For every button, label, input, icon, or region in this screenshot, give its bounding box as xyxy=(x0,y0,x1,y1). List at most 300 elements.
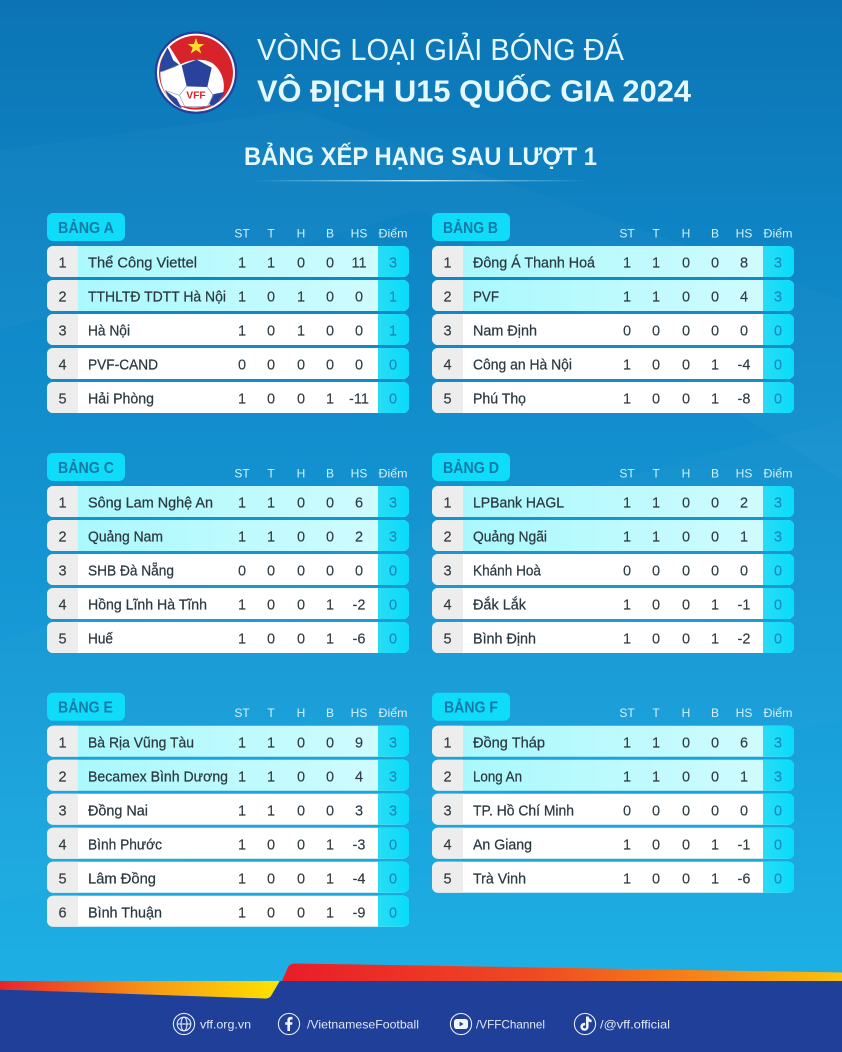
row 4: 1 xyxy=(711,358,719,374)
row 4: 4 xyxy=(443,837,452,853)
youtube text: /VFFChannel xyxy=(476,1018,545,1032)
column headers xyxy=(234,226,408,240)
row 1: 0 xyxy=(297,256,305,272)
row 4: 0 xyxy=(652,837,660,853)
row 1: Sông Lam Nghệ An xyxy=(88,496,213,512)
row 2 xyxy=(47,520,409,551)
row 2: 1 xyxy=(238,530,246,546)
row 2: 1 xyxy=(389,290,397,306)
row 1: 11 xyxy=(351,256,367,272)
row 1: 1 xyxy=(623,735,631,751)
row 2: 3 xyxy=(774,769,782,785)
row 2: Quảng Ngãi xyxy=(473,530,547,546)
row 4: 0 xyxy=(238,358,246,374)
panel: Bảng E xyxy=(47,693,409,927)
row 5 xyxy=(432,862,794,893)
row 3: 3 xyxy=(443,564,452,580)
row 2: 0 xyxy=(297,530,305,546)
row 2: 1 xyxy=(238,290,246,306)
row 2: 0 xyxy=(326,290,334,306)
row 5: -2 xyxy=(738,632,750,648)
row 6: 1 xyxy=(238,905,246,921)
row 2: 0 xyxy=(326,530,334,546)
row 5 xyxy=(47,862,409,893)
row 3: 0 xyxy=(740,803,748,819)
panel: Bảng F xyxy=(432,693,794,893)
row 2: 2 xyxy=(58,530,67,546)
row 4: 0 xyxy=(682,598,690,614)
row 2: Quảng Nam xyxy=(88,530,163,546)
row 4: 0 xyxy=(267,358,275,374)
column headers: HS xyxy=(736,226,752,240)
row 2: 0 xyxy=(326,769,334,785)
row 4 xyxy=(47,588,409,619)
row 1: 8 xyxy=(740,256,748,272)
column headers: Điểm xyxy=(378,706,408,720)
column headers: Điểm xyxy=(378,226,408,240)
row 2 xyxy=(47,760,409,791)
row 2: 2 xyxy=(58,769,67,785)
row 1: 0 xyxy=(682,735,690,751)
row 3: 0 xyxy=(326,324,334,340)
row 1: 2 xyxy=(740,496,748,512)
row 2: 3 xyxy=(774,530,782,546)
row 5: -11 xyxy=(349,392,369,408)
column headers: T xyxy=(267,226,275,240)
column headers: Điểm xyxy=(378,466,408,480)
group label xyxy=(432,453,510,481)
row 2 xyxy=(47,280,409,311)
row 2: 1 xyxy=(740,769,748,785)
row 1: 1 xyxy=(58,256,67,272)
column headers: T xyxy=(652,466,660,480)
row 3: 0 xyxy=(740,324,748,340)
row 4: -4 xyxy=(738,358,750,374)
row 1: 1 xyxy=(652,496,660,512)
row 4: -1 xyxy=(738,837,750,853)
row 5: 0 xyxy=(682,871,690,887)
row 6: -9 xyxy=(353,905,365,921)
row 1: 1 xyxy=(652,735,660,751)
panel: Bảng C xyxy=(47,453,409,653)
row 5: 0 xyxy=(389,392,397,408)
row 2: Long An xyxy=(473,769,522,785)
row 1: 0 xyxy=(326,496,334,512)
tiktok text: /@vff.official xyxy=(600,1018,670,1032)
row 1: 1 xyxy=(58,735,67,751)
row 5: 1 xyxy=(326,871,334,887)
row 2: 2 xyxy=(355,530,363,546)
row 5: 0 xyxy=(297,871,305,887)
row 5 xyxy=(47,382,409,413)
row 3 xyxy=(432,554,794,585)
row 6 xyxy=(47,896,409,927)
row 5: 0 xyxy=(267,632,275,648)
row 1: 1 xyxy=(238,496,246,512)
row 2: 0 xyxy=(711,290,719,306)
group label xyxy=(432,213,510,241)
row 4: 4 xyxy=(58,598,67,614)
row 4: 1 xyxy=(326,837,334,853)
row 4: -3 xyxy=(353,837,365,853)
row 5: -6 xyxy=(353,632,365,648)
row 1: 6 xyxy=(355,496,363,512)
row 2: 1 xyxy=(623,530,631,546)
title: VÒNG LOẠI GIẢI BÓNG ĐÁ xyxy=(257,32,624,67)
column headers: T xyxy=(652,706,660,720)
row 3: 0 xyxy=(267,564,275,580)
row 1: Đông Á Thanh Hoá xyxy=(473,255,596,272)
row 1: 3 xyxy=(389,735,397,751)
row 1: 3 xyxy=(774,256,782,272)
row 6: 0 xyxy=(267,905,275,921)
row 3: 0 xyxy=(355,324,363,340)
row 2: 1 xyxy=(623,290,631,306)
row 2: 0 xyxy=(682,290,690,306)
title: VÔ ĐỊCH U15 QUỐC GIA 2024 xyxy=(257,72,692,108)
row 1 xyxy=(432,246,794,277)
column headers: T xyxy=(652,226,660,240)
column headers: B xyxy=(711,706,719,720)
row 4: 4 xyxy=(443,598,452,614)
row 4: -2 xyxy=(353,598,365,614)
row 4: 0 xyxy=(297,358,305,374)
group label xyxy=(47,693,125,721)
column headers: Điểm xyxy=(764,706,792,720)
row 2 xyxy=(432,520,794,551)
row 1: 1 xyxy=(443,735,452,751)
row 3 xyxy=(47,554,409,585)
row 3: Khánh Hoà xyxy=(473,564,542,580)
row 1: 1 xyxy=(58,496,67,512)
group label xyxy=(47,453,125,481)
row 5: 1 xyxy=(623,392,631,408)
row 4: 1 xyxy=(623,358,631,374)
title xyxy=(257,32,692,108)
row 5: 5 xyxy=(443,632,452,648)
row 5: -6 xyxy=(738,871,750,887)
group label xyxy=(432,693,510,721)
row 3: Hà Nội xyxy=(88,324,130,340)
group label: BẢNG A xyxy=(58,220,114,237)
row 1: 1 xyxy=(267,496,275,512)
row 6: 1 xyxy=(326,905,334,921)
row 4 xyxy=(432,588,794,619)
column headers: HS xyxy=(351,466,367,480)
row 2: PVF xyxy=(473,290,499,306)
row 2: 0 xyxy=(711,769,719,785)
row 2: 0 xyxy=(297,769,305,785)
row 1: 3 xyxy=(774,735,782,751)
row 4: 1 xyxy=(623,598,631,614)
row 3: 1 xyxy=(238,324,246,340)
row 2: 1 xyxy=(267,769,275,785)
row 6: 0 xyxy=(297,905,305,921)
row 1: 3 xyxy=(774,496,782,512)
column headers: H xyxy=(297,466,305,480)
row 5 xyxy=(432,382,794,413)
row 4: Công an Hà Nội xyxy=(473,358,572,374)
row 1 xyxy=(47,246,409,277)
row 4: 0 xyxy=(389,837,397,853)
row 3: 0 xyxy=(711,564,719,580)
row 2: 2 xyxy=(443,769,452,785)
column headers: ST xyxy=(619,466,635,480)
logo: VFF football emblem: VFF xyxy=(186,90,206,101)
row 1: 1 xyxy=(623,496,631,512)
footer band with ribbons xyxy=(0,964,842,1052)
row 2: 3 xyxy=(389,530,397,546)
column headers: B xyxy=(711,226,719,240)
row 2: 0 xyxy=(682,530,690,546)
row 2: 1 xyxy=(267,530,275,546)
row 4: Đắk Lắk xyxy=(473,597,527,614)
column headers: ST xyxy=(619,226,635,240)
panel: Bảng A xyxy=(47,213,409,413)
row 5: Phú Thọ xyxy=(473,392,526,408)
row 5: 0 xyxy=(297,392,305,408)
group label: BẢNG C xyxy=(58,460,114,477)
row 1 xyxy=(47,726,409,757)
row 5: 1 xyxy=(711,632,719,648)
group label: BẢNG D xyxy=(443,460,499,477)
row 4: 0 xyxy=(267,598,275,614)
row 2: 1 xyxy=(652,769,660,785)
row 3: 3 xyxy=(389,803,397,819)
row 5: 5 xyxy=(58,632,67,648)
row 2: Becamex Bình Dương xyxy=(88,769,228,785)
row 3: 1 xyxy=(297,324,305,340)
group label: BẢNG B xyxy=(443,220,498,237)
row 4 xyxy=(47,828,409,859)
column headers xyxy=(619,706,792,720)
row 5: 0 xyxy=(267,392,275,408)
column headers: HS xyxy=(351,706,367,720)
row 4 xyxy=(432,828,794,859)
row 2: 4 xyxy=(740,290,748,306)
row 2: 2 xyxy=(58,290,67,306)
row 3: 0 xyxy=(774,324,782,340)
row 5: -8 xyxy=(738,392,750,408)
row 5 xyxy=(432,622,794,653)
column headers: ST xyxy=(619,706,635,720)
row 1: 0 xyxy=(297,735,305,751)
row 2: 0 xyxy=(711,530,719,546)
row 2: 1 xyxy=(238,769,246,785)
row 1: 0 xyxy=(682,496,690,512)
row 2: 1 xyxy=(297,290,305,306)
row 3: 1 xyxy=(267,803,275,819)
icon: youtube xyxy=(450,1013,472,1035)
row 5: 0 xyxy=(774,392,782,408)
row 3 xyxy=(47,794,409,825)
row 5: 1 xyxy=(238,632,246,648)
row 1: 0 xyxy=(326,735,334,751)
row 1: 0 xyxy=(711,735,719,751)
row 5: 1 xyxy=(326,632,334,648)
row 5: 1 xyxy=(326,392,334,408)
subtitle: BẢNG XẾP HẠNG SAU LƯỢT 1 xyxy=(244,141,597,171)
row 5: Bình Định xyxy=(473,632,536,648)
row 1: 1 xyxy=(267,256,275,272)
row 2: 0 xyxy=(682,769,690,785)
row 2: TTHLTĐ TDTT Hà Nội xyxy=(88,290,226,306)
row 2: 3 xyxy=(389,769,397,785)
row 5: 1 xyxy=(238,392,246,408)
row 5: 5 xyxy=(58,392,67,408)
row 1: 1 xyxy=(652,256,660,272)
row 1 xyxy=(432,486,794,517)
row 1: 1 xyxy=(238,735,246,751)
row 4: -1 xyxy=(738,598,750,614)
row 2: 4 xyxy=(355,769,363,785)
row 3 xyxy=(432,314,794,345)
row 5: 1 xyxy=(238,871,246,887)
column headers: Điểm xyxy=(764,466,792,480)
row 4: 0 xyxy=(389,598,397,614)
panel: Bảng B xyxy=(432,213,794,413)
row 4: 0 xyxy=(652,358,660,374)
row 4: 0 xyxy=(297,837,305,853)
row 4: 1 xyxy=(711,598,719,614)
row 4 xyxy=(432,348,794,379)
row 2: 1 xyxy=(623,769,631,785)
row 3: 0 xyxy=(774,803,782,819)
row 1: 1 xyxy=(443,256,452,272)
row 2: 0 xyxy=(355,290,363,306)
group label xyxy=(47,213,125,241)
row 3: 0 xyxy=(682,803,690,819)
row 4: An Giang xyxy=(473,837,532,853)
row 4: 0 xyxy=(774,358,782,374)
column headers: ST xyxy=(234,706,250,720)
row 4: 0 xyxy=(389,358,397,374)
row 5: 0 xyxy=(774,632,782,648)
row 3: 0 xyxy=(623,803,631,819)
row 3: 0 xyxy=(297,564,305,580)
group label: BẢNG F xyxy=(444,700,498,717)
row 3: 0 xyxy=(682,324,690,340)
row 1: 3 xyxy=(389,256,397,272)
row 3: Nam Định xyxy=(473,324,537,340)
row 3: 0 xyxy=(326,564,334,580)
row 4: 1 xyxy=(623,837,631,853)
row 3: Đồng Nai xyxy=(88,803,148,819)
column headers: H xyxy=(682,706,690,720)
row 2: 2 xyxy=(443,530,452,546)
row 3: 0 xyxy=(267,324,275,340)
column headers: T xyxy=(267,706,275,720)
row 4: 1 xyxy=(326,598,334,614)
row 6: Bình Thuận xyxy=(88,905,162,921)
row 3: 3 xyxy=(58,324,67,340)
row 5: Trà Vinh xyxy=(473,871,526,887)
row 4: 1 xyxy=(238,837,246,853)
column headers: H xyxy=(297,706,305,720)
column headers: B xyxy=(711,466,719,480)
row 1: 1 xyxy=(623,256,631,272)
row 4: Bình Phước xyxy=(88,837,162,853)
row 5: 0 xyxy=(774,871,782,887)
row 5: Lâm Đồng xyxy=(88,871,156,887)
row 4: Hồng Lĩnh Hà Tĩnh xyxy=(88,598,207,614)
row 4: 4 xyxy=(443,358,452,374)
row 5: 1 xyxy=(623,871,631,887)
column headers: HS xyxy=(736,706,752,720)
row 3: 0 xyxy=(740,564,748,580)
row 5: 0 xyxy=(652,632,660,648)
column headers: T xyxy=(267,466,275,480)
row 4: 1 xyxy=(711,837,719,853)
row 1: 6 xyxy=(740,735,748,751)
row 3: 0 xyxy=(711,324,719,340)
row 5: 0 xyxy=(682,392,690,408)
row 1: LPBank HAGL xyxy=(473,496,564,512)
row 4: 0 xyxy=(355,358,363,374)
column headers: HS xyxy=(736,466,752,480)
row 5: 0 xyxy=(682,632,690,648)
row 3: 1 xyxy=(389,324,397,340)
row 3 xyxy=(432,794,794,825)
row 3: SHB Đà Nẵng xyxy=(88,563,174,580)
row 1: 1 xyxy=(238,256,246,272)
row 2: 1 xyxy=(652,290,660,306)
row 6: 0 xyxy=(389,905,397,921)
row 2: 0 xyxy=(267,290,275,306)
column headers: ST xyxy=(234,466,250,480)
row 3: 0 xyxy=(389,564,397,580)
row 5: Hải Phòng xyxy=(88,392,154,408)
row 5: 0 xyxy=(652,392,660,408)
row 5: 5 xyxy=(443,871,452,887)
row 3: 0 xyxy=(238,564,246,580)
row 1 xyxy=(47,486,409,517)
row 1: 0 xyxy=(682,256,690,272)
row 6: 6 xyxy=(58,905,67,921)
row 5: 0 xyxy=(297,632,305,648)
row 4: PVF-CAND xyxy=(88,358,158,374)
icon: facebook xyxy=(278,1013,300,1035)
row 1: 9 xyxy=(355,735,363,751)
row 4: 0 xyxy=(682,358,690,374)
row 3: 0 xyxy=(682,564,690,580)
row 3: 3 xyxy=(58,803,67,819)
row 1: 1 xyxy=(443,496,452,512)
column headers: B xyxy=(326,226,334,240)
row 1: 3 xyxy=(389,496,397,512)
row 1: Bà Rịa Vũng Tàu xyxy=(88,735,194,751)
row 3: 0 xyxy=(623,324,631,340)
row 5: 1 xyxy=(711,871,719,887)
row 4: 4 xyxy=(58,358,67,374)
row 2 xyxy=(432,760,794,791)
row 5: 1 xyxy=(623,632,631,648)
row 2: 3 xyxy=(774,290,782,306)
row 1: Đồng Tháp xyxy=(473,735,545,751)
row 1 xyxy=(432,726,794,757)
row 5: 0 xyxy=(389,871,397,887)
row 3: 3 xyxy=(355,803,363,819)
row 4: 0 xyxy=(652,598,660,614)
row 3: 0 xyxy=(326,803,334,819)
row 5: 5 xyxy=(443,392,452,408)
row 3: 0 xyxy=(652,564,660,580)
row 5: 0 xyxy=(389,632,397,648)
column headers xyxy=(619,226,792,240)
panel: Bảng D xyxy=(432,453,794,653)
row 4: 0 xyxy=(682,837,690,853)
row 2: 1 xyxy=(740,530,748,546)
